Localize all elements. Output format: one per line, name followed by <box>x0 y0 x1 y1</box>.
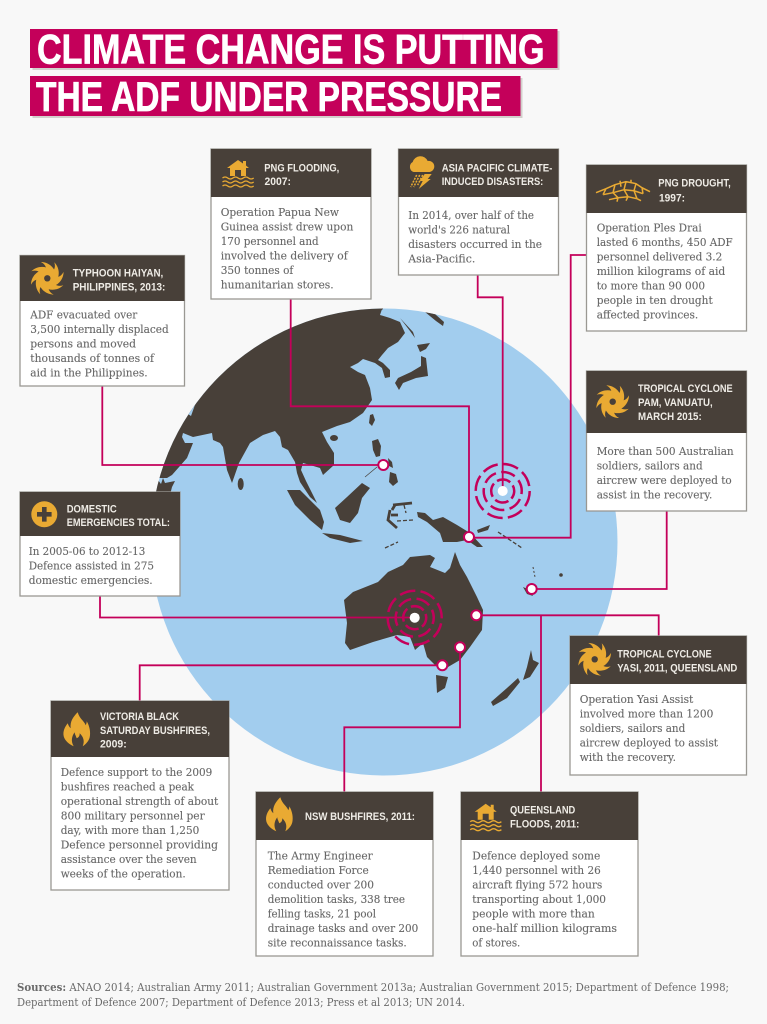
heading: Cyclone Pam: PAM, VANUATU, <box>638 397 713 409</box>
Sulawesi <box>388 503 412 528</box>
land masses <box>156 308 563 706</box>
text: Victoria bushfires body: day, with more than 1,250 <box>61 824 199 837</box>
Sumatra <box>287 490 324 530</box>
text: PNG flooding body <box>221 206 353 292</box>
text: PNG drought body: lasted 6 months, 450 ADF <box>597 236 733 249</box>
heading: Victoria bushfires <box>100 711 210 751</box>
New Britain <box>477 525 490 533</box>
text: Cyclone Pam body: More than 500 Australian <box>597 445 734 458</box>
Hainan <box>330 435 338 441</box>
text: Typhoon Haiyan body: persons and moved <box>30 337 136 350</box>
Hokkaido <box>417 343 430 352</box>
text: Cyclone Yasi body: involved more than 1200 <box>580 708 713 720</box>
text: Domestic emergencies body: domestic emergencies. <box>29 574 153 587</box>
text: Asia Pacific body <box>407 209 542 266</box>
Java <box>322 533 363 543</box>
heading: Victoria bushfires: SATURDAY BUSHFIRES, <box>100 725 210 737</box>
text: Cyclone Yasi body: soldiers, sailors and <box>580 722 685 735</box>
text: PNG flooding body: involved the delivery of <box>221 250 349 262</box>
text: PNG flooding body: Guinea assist drew upon <box>221 220 353 234</box>
text: Queensland floods body <box>472 849 617 949</box>
text: PNG flooding body: Operation Papua New <box>221 206 340 219</box>
text: Victoria bushfires body: 800 military personnel per <box>61 810 205 822</box>
text: NSW bushfires body: drainage tasks and over 200 <box>268 922 418 935</box>
text: Cyclone Pam body: assist in the recovery. <box>597 488 712 502</box>
heading: Victoria bushfires: 2009: <box>100 739 127 751</box>
panel: Asia Pacific climate-induced disasters <box>398 149 558 275</box>
text: NSW bushfires body <box>268 849 418 949</box>
heading: Asia Pacific: ASIA PACIFIC CLIMATE- <box>442 163 552 175</box>
text: Victoria bushfires body <box>61 766 219 880</box>
heading: Typhoon Haiyan: PHILIPPINES, 2013: <box>73 282 165 294</box>
icon: cyclone <box>593 382 632 421</box>
heading: PNG flooding <box>264 163 339 188</box>
text: NSW bushfires body: The Army Engineer <box>268 849 373 862</box>
text: Victoria bushfires body: assistance over the seven <box>61 853 197 866</box>
icon: storm cloud <box>410 156 434 189</box>
text: Queensland floods body: Defence deployed some <box>472 849 600 862</box>
Honshu <box>395 356 428 390</box>
icon: plus <box>31 501 57 527</box>
text: Domestic emergencies body: In 2005-06 to 2012-13 <box>29 545 145 558</box>
text: PNG flooding body: 350 tonnes of <box>221 264 294 277</box>
text: NSW bushfires body: conducted over 200 <box>268 878 374 891</box>
text: Queensland floods body: 1,440 personnel with 26 <box>472 864 601 877</box>
heading: Cyclone Yasi: YASI, 2011, QUEENSLAND <box>617 663 737 675</box>
text: Typhoon Haiyan body: aid in the Philippines. <box>30 366 148 379</box>
icon: flooded house <box>470 804 501 831</box>
icon: flame <box>63 712 90 746</box>
text: Victoria bushfires body: bushfires reached a peak <box>61 780 194 794</box>
heading: Domestic emergencies: DOMESTIC <box>67 504 117 516</box>
icon: cracked earth <box>596 180 650 202</box>
Borneo <box>335 483 370 523</box>
New Zealand <box>523 650 539 680</box>
panel: Tropical Cyclone Yasi <box>570 636 746 775</box>
text: Victoria bushfires body: operational strength of about <box>61 795 219 808</box>
text: Victoria bushfires body: weeks of the operation. <box>61 868 186 880</box>
icon: flooded house <box>222 160 254 187</box>
heading: Typhoon Haiyan: TYPHOON HAIYAN, <box>73 268 163 280</box>
heading: Domestic emergencies <box>67 504 170 529</box>
text: PNG drought body: million kilograms of aid <box>597 265 725 278</box>
text: PNG drought body: personnel delivered 3.2 <box>597 251 722 264</box>
text: Asia Pacific body: disasters occurred in the <box>408 238 542 251</box>
panel: PNG drought 1997 <box>586 165 746 331</box>
panel: Typhoon Haiyan <box>20 256 184 386</box>
panel: Queensland floods 2011 <box>461 792 638 956</box>
heading: Cyclone Pam <box>638 383 733 423</box>
Australia <box>344 552 483 667</box>
icon: cyclone <box>28 259 67 298</box>
Asia <box>160 308 405 503</box>
text: Asia Pacific body: Asia-Pacific. <box>407 252 475 266</box>
panel: NSW bushfires 2011 <box>256 792 433 956</box>
heading: PNG flooding: PNG FLOODING, <box>264 163 339 175</box>
title: CLIMATE CHANGE IS PUTTING <box>37 26 544 72</box>
Tasmania <box>436 675 448 693</box>
panel: Tropical Cyclone Pam <box>586 371 746 511</box>
text: Queensland floods body: one-half million kilograms <box>472 922 617 935</box>
Africa horn <box>156 478 175 492</box>
text: Domestic emergencies body <box>29 545 154 587</box>
heading: NSW bushfires: NSW BUSHFIRES, 2011: <box>305 811 415 823</box>
heading: Asia Pacific: INDUCED DISASTERS: <box>442 176 543 188</box>
heading: Cyclone Pam: MARCH 2015: <box>638 411 702 423</box>
Sri Lanka <box>238 478 244 490</box>
radar rings: Australia <box>383 586 447 650</box>
text: Cyclone Yasi body: Operation Yasi Assist <box>580 693 694 706</box>
text: PNG flooding body: humanitarian stores. <box>221 278 334 292</box>
heading: Typhoon Haiyan <box>73 268 165 294</box>
text: Cyclone Pam body <box>597 445 734 502</box>
heading: PNG drought <box>658 178 731 205</box>
heading: PNG drought: 1997: <box>659 193 685 205</box>
text: Domestic emergencies body: Defence assisted in 275 <box>29 560 154 572</box>
ocean disc <box>150 308 618 776</box>
text: Cyclone Yasi body: with the recovery. <box>580 751 676 764</box>
text: Queensland floods body: aircraft flying 572 hours <box>472 878 603 891</box>
sources <box>17 981 729 1009</box>
text: PNG drought body: Operation Ples Drai <box>597 222 702 235</box>
heading: Queensland floods: FLOODS, 2011: <box>510 818 579 830</box>
text: PNG flooding body: 170 personnel and <box>221 235 319 248</box>
text: PNG drought body: affected provinces. <box>597 309 698 322</box>
text: NSW bushfires body: felling tasks, 21 pool <box>268 907 376 920</box>
text: Cyclone Pam body: soldiers, sailors and <box>597 460 703 472</box>
panel: PNG flooding 2007 <box>211 149 371 299</box>
text: NSW bushfires body: demolition tasks, 338 tree <box>268 893 405 906</box>
text: Typhoon Haiyan body: ADF evacuated over <box>29 308 138 321</box>
text: Queensland floods body: transporting about 1,000 <box>472 893 606 906</box>
text: PNG drought body: to more than 90 000 <box>597 280 705 293</box>
panel: Victoria Black Saturday bushfires <box>51 701 229 890</box>
icon: flame <box>266 797 293 831</box>
text: Typhoon Haiyan body <box>29 308 169 379</box>
text: PNG drought body <box>597 222 733 322</box>
heading: Cyclone Yasi <box>617 648 737 675</box>
location markers <box>378 460 537 670</box>
text: Cyclone Yasi body: aircrew deployed to assist <box>580 736 719 750</box>
text: Asia Pacific body: world's 226 natural <box>408 224 510 236</box>
heading: Cyclone Pam: TROPICAL CYCLONE <box>638 383 733 395</box>
heading: PNG flooding: 2007: <box>264 176 291 188</box>
text: Victoria bushfires body: Defence personnel providing <box>61 838 218 852</box>
heading: Queensland floods: QUEENSLAND <box>510 805 575 817</box>
text: NSW bushfires body: site reconnaissance tasks. <box>268 936 407 949</box>
connector lines <box>100 255 667 792</box>
heading: Domestic emergencies: EMERGENCIES TOTAL: <box>67 517 170 529</box>
Taiwan <box>369 414 375 426</box>
text: PNG drought body: people in ten drought <box>597 294 713 307</box>
heading: PNG drought: PNG DROUGHT, <box>658 178 731 190</box>
text: NSW bushfires body: Remediation Force <box>268 864 369 877</box>
text: Queensland floods body: people with more than <box>472 907 595 920</box>
text: Cyclone Pam body: aircrew were deployed to <box>597 474 732 487</box>
globe map <box>156 308 618 776</box>
heading: Victoria bushfires: VICTORIA BLACK <box>100 711 180 723</box>
Philippines <box>372 439 381 457</box>
text: Victoria bushfires body: Defence support to the 2009 <box>61 766 212 779</box>
text: Typhoon Haiyan body: 3,500 internally displaced <box>30 323 169 336</box>
text: Queensland floods body: of stores. <box>472 936 520 949</box>
sources: Department of Defence 2007; Department of Defence 2013; Press et al 2013; UN 2014. <box>17 996 465 1009</box>
text: Typhoon Haiyan body: thousands of tonnes of <box>30 352 155 365</box>
panel: Domestic emergencies total <box>20 492 180 596</box>
Kamchatka <box>425 312 444 326</box>
title <box>30 26 560 120</box>
small islands <box>385 505 522 548</box>
New Guinea <box>417 512 483 547</box>
Sakhalin <box>400 318 415 338</box>
text: Asia Pacific body: In 2014, over half of the <box>408 209 534 222</box>
New Caledonia <box>523 587 533 596</box>
heading: Queensland floods <box>510 805 579 830</box>
title: THE ADF UNDER PRESSURE <box>36 73 502 120</box>
heading: Asia Pacific <box>442 163 552 188</box>
radar rings: Asia-Pacific <box>476 464 530 518</box>
text: Cyclone Yasi body <box>580 693 719 764</box>
sources: Sources: ANAO 2014; Australian Army 2011; Australian Government 2013a; Australian Government 2015; Department of Defence 1998; <box>17 981 729 994</box>
heading: Cyclone Yasi: TROPICAL CYCLONE <box>617 648 712 660</box>
icon: cyclone <box>575 640 614 679</box>
Caspian sea <box>188 405 195 416</box>
